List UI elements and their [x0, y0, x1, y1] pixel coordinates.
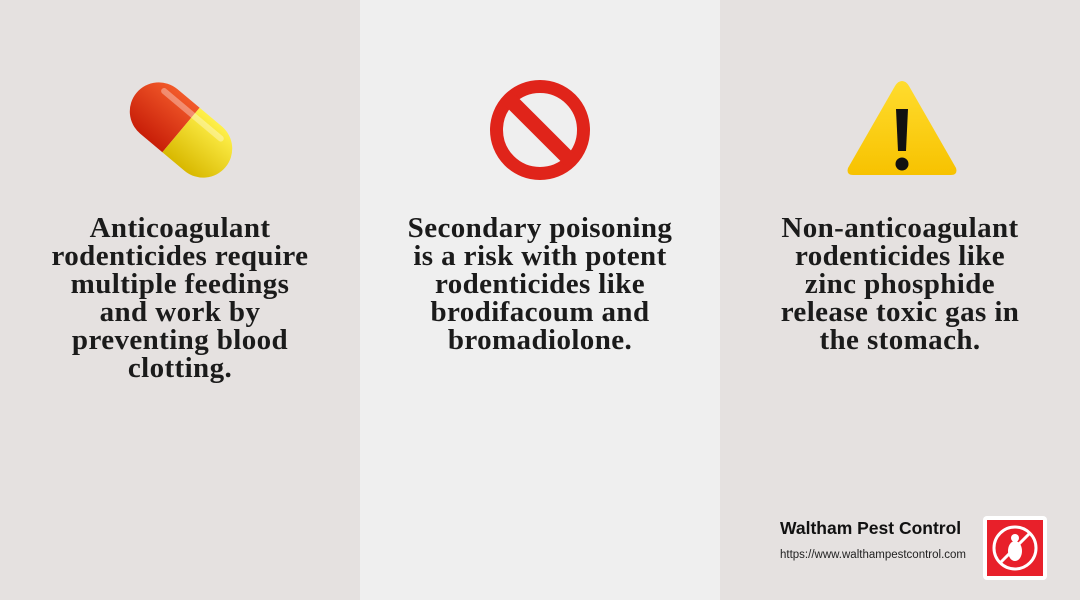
text: non-anticoagulant: the stomach.: [819, 324, 981, 356]
brand block: [780, 516, 1047, 580]
panel: non-anticoagulant: [720, 0, 1080, 600]
text: anticoagulant: multiple feedings: [71, 268, 289, 300]
text: anticoagulant: and work by: [100, 296, 260, 328]
text: non-anticoagulant: release toxic gas in: [781, 296, 1019, 328]
text: anticoagulant: clotting.: [128, 352, 232, 384]
text: anticoagulant: [52, 212, 308, 384]
text: secondary poisoning: is a risk with potent: [413, 240, 667, 272]
icon: warning: [848, 81, 956, 175]
text: anticoagulant: Anticoagulant: [90, 212, 270, 244]
text: secondary poisoning: bromadiolone.: [448, 324, 632, 356]
text: anticoagulant: preventing blood: [72, 324, 288, 356]
brand url: https://www.walthampestcontrol.com: [780, 549, 966, 561]
icon: prohibited: [490, 80, 590, 180]
panel: secondary poisoning: [360, 0, 720, 600]
text: secondary poisoning: rodenticides like: [435, 268, 645, 300]
text: non-anticoagulant: zinc phosphide: [805, 268, 995, 300]
text: non-anticoagulant: Non-anticoagulant: [781, 212, 1019, 244]
text: non-anticoagulant: rodenticides like: [795, 240, 1005, 272]
logo: [983, 516, 1047, 580]
text: non-anticoagulant: [781, 212, 1019, 356]
text: secondary poisoning: Secondary poisoning: [408, 212, 672, 244]
icon: pill: [130, 82, 232, 178]
brand name: Waltham Pest Control: [780, 518, 961, 538]
text: secondary poisoning: [408, 212, 672, 356]
text: secondary poisoning: brodifacoum and: [430, 296, 649, 328]
text: anticoagulant: rodenticides require: [52, 240, 308, 272]
panel: anticoagulant: [0, 0, 360, 600]
